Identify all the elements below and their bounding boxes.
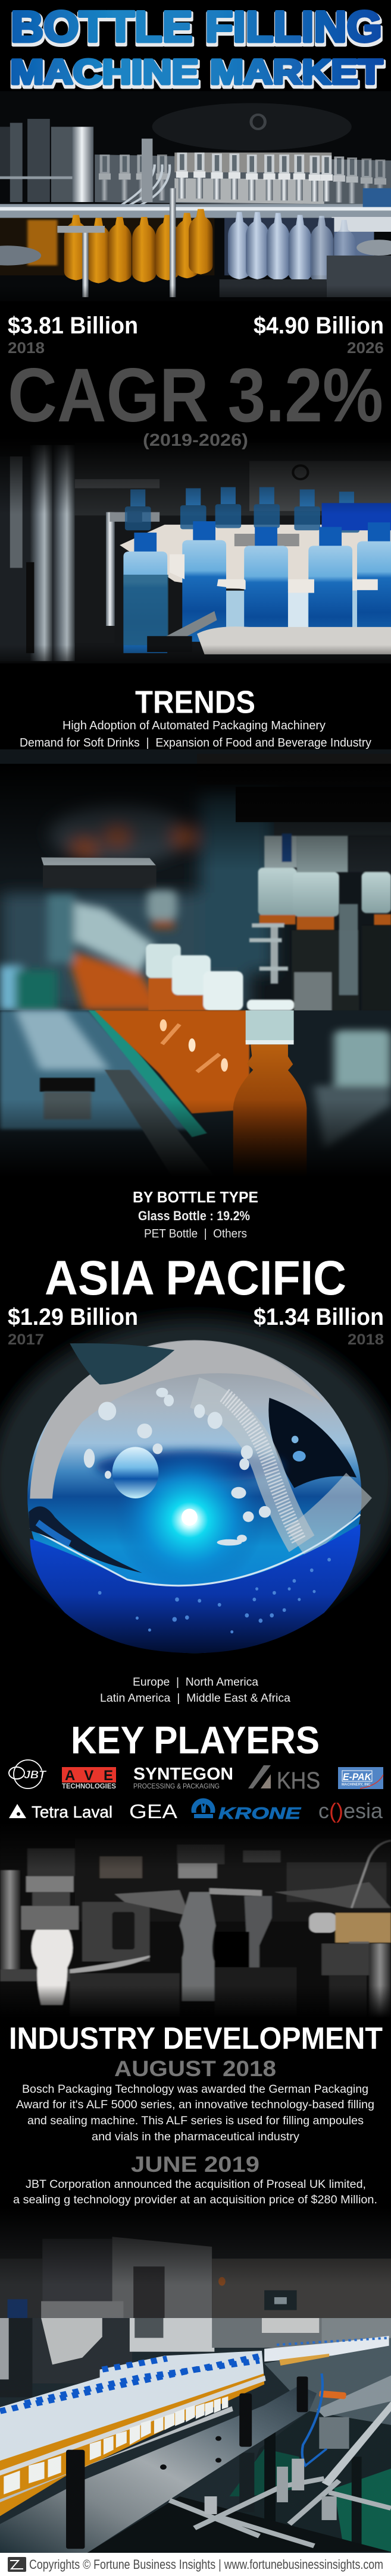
wall panels	[0, 2237, 391, 2318]
water surface line	[30, 1514, 360, 1586]
clear bottles band	[0, 2351, 264, 2468]
section: by bottle type	[133, 1188, 258, 1240]
title	[10, 3, 383, 92]
logo: AVE Technologies: AVE	[65, 1768, 113, 1784]
paragraph: JBT: JBT Corporation announced the acquisition of Proseal UK limited,	[26, 2178, 366, 2191]
well under plate	[220, 591, 391, 632]
logo: Krone: KRONE	[218, 1804, 302, 1822]
large bubble	[112, 1447, 158, 1498]
globe: water sphere	[0, 1318, 391, 1653]
blurred caps	[0, 890, 177, 1011]
background factory	[0, 2318, 391, 2425]
blue caps	[0, 2355, 262, 2411]
machine tank	[152, 103, 352, 150]
paragraph: Bosch: and vials in the pharmaceutical industry	[92, 2131, 300, 2143]
bubble spray	[195, 1393, 359, 1544]
conveyor	[0, 1010, 224, 1189]
far bottles	[264, 2336, 389, 2366]
background wall	[75, 443, 391, 515]
hose	[352, 1841, 391, 1908]
left cables and stripes	[0, 445, 115, 661]
logo: JBT	[9, 1760, 47, 1788]
deep blue band	[95, 1451, 284, 1483]
glass bottle rear	[243, 1896, 272, 1979]
stat: CAGR: (2019-2026)	[143, 431, 248, 450]
pneumatic cylinder	[309, 1913, 391, 1975]
stat: 2018 Asia Pacific value: 2018	[348, 1331, 384, 1348]
small bubbles	[84, 1388, 306, 1545]
logo: Coesia: c()esia	[318, 1799, 383, 1823]
milk bottle	[32, 1930, 73, 2005]
footer logo	[8, 2557, 26, 2572]
rail top	[0, 2376, 266, 2476]
section: industry development	[9, 2021, 383, 2206]
photo: grey bottle blowing machine	[0, 1823, 391, 2021]
date: August 2018: AUGUST 2018	[114, 2057, 276, 2081]
trend line 2: Demand for Soft Drinks | Expansion of Food and Beverage Industry	[20, 736, 371, 750]
section: by bottle type: PET Bottle | Others	[144, 1227, 247, 1240]
rim highlight	[30, 1341, 324, 1498]
date: June 2019: JUNE 2019	[131, 2152, 259, 2177]
logo: E-PAK: MACHINERY, INC.	[342, 1783, 371, 1787]
blue hose	[302, 2373, 327, 2465]
logo: KHS	[248, 1765, 320, 1794]
stat: 2017 Asia Pacific value: $1.29 Billion	[8, 1304, 138, 1330]
amber bottles	[64, 209, 212, 284]
right lower cylinders	[214, 1944, 391, 2021]
paragraph: Bosch: Award for it's ALF 5000 series, an innovative technology-based filling	[16, 2099, 374, 2111]
dark upper right	[268, 1398, 356, 1488]
filler heads	[249, 833, 391, 984]
stat: 2026 market value	[254, 313, 384, 357]
lower rail	[0, 2406, 233, 2502]
photo: orange bottles lower	[0, 1010, 391, 1189]
machinery right	[292, 904, 391, 1011]
background glow	[0, 1318, 391, 1637]
logo: Krone	[192, 1799, 302, 1822]
logo: JBT: JBT	[24, 1769, 47, 1781]
stat: 2018 market value: 2018	[8, 339, 45, 357]
other regions list: Europe | North America	[133, 1676, 258, 1689]
section: trends	[20, 685, 371, 750]
trend line 1: High Adoption of Automated Packaging Machinery	[62, 719, 326, 732]
bottles behind	[95, 1010, 249, 1113]
logo: E-PAK: E-PAK	[343, 1771, 373, 1783]
logo: KHS: KHS	[277, 1768, 320, 1794]
central glow	[115, 1448, 264, 1592]
hood	[197, 754, 391, 836]
photo: filling machine with amber and clear bottles	[0, 91, 391, 301]
back row bottles	[125, 487, 391, 533]
heading: key players: KEY PLAYERS	[71, 1718, 320, 1762]
stat: 2017 Asia Pacific value: 2017	[8, 1331, 44, 1348]
upper columns	[0, 1844, 280, 1969]
logo: Syntegon: PROCESSING & PACKAGING	[133, 1783, 220, 1790]
sharp caps	[146, 944, 294, 1010]
paragraph: JBT	[13, 2178, 377, 2206]
footer	[0, 2553, 391, 2576]
pour stream	[70, 1343, 174, 1384]
valve row	[95, 153, 391, 206]
logo: AVE Technologies: TECHNOLOGIES	[62, 1783, 116, 1790]
photo: blue bottles on filling plate	[0, 438, 391, 663]
heading: trends: TRENDS	[135, 685, 255, 720]
stat: 2018 market value	[8, 313, 138, 357]
shelf	[41, 858, 157, 888]
water center glow	[182, 1509, 198, 1526]
orange handle	[319, 2391, 346, 2399]
hoses	[120, 138, 170, 208]
stat: 2026 market value: 2026	[347, 339, 384, 357]
stat: 2018 Asia Pacific value	[254, 1304, 384, 1348]
bottle backdrop	[0, 218, 374, 275]
conveyor brackets	[66, 2376, 308, 2549]
sensor arm	[106, 511, 159, 626]
photo: orange bottles upper	[0, 750, 391, 1011]
logo: AVE Technologies	[62, 1767, 116, 1790]
stat: 2026 market value: $4.90 Billion	[254, 313, 384, 339]
poles and table	[0, 188, 391, 297]
lower fade	[0, 645, 391, 675]
steel beam	[0, 2385, 317, 2553]
foreground frame	[87, 2459, 391, 2553]
metal platform	[0, 1882, 391, 2021]
logos row	[9, 1760, 383, 1823]
section: by bottle type: BY BOTTLE TYPE	[133, 1188, 258, 1206]
heading: Asia Pacific: ASIA PACIFIC	[45, 1251, 346, 1305]
right machinery	[224, 2376, 391, 2552]
stat: 2017 Asia Pacific value	[8, 1304, 138, 1348]
sphere upper	[27, 1340, 362, 1653]
white plate	[120, 525, 391, 593]
section: by bottle type: Glass Bottle : 19.2%	[138, 1208, 250, 1223]
stat: 2018 Asia Pacific value: $1.34 Billion	[254, 1304, 384, 1330]
machinery background	[75, 1838, 391, 1922]
logo: E-PAK	[338, 1767, 383, 1789]
photo: conveyor with juice bottles	[0, 2318, 391, 2554]
wave left	[29, 1506, 142, 1573]
logo: Syntegon: SYNTEGON	[133, 1765, 233, 1784]
paragraph: Bosch: and sealing machine. This ALF series is used for filling ampoules	[27, 2115, 364, 2127]
juice band	[0, 2373, 264, 2516]
paragraph: Bosch: Bosch Packaging Technology was awarded the German Packaging	[22, 2083, 368, 2096]
blue water body	[30, 1524, 361, 1653]
logo: Tetra Laval: Tetra Laval	[32, 1803, 112, 1821]
other regions list	[100, 1676, 290, 1705]
base ring and rod	[147, 611, 391, 654]
other regions list: Latin America | Middle East & Africa	[100, 1692, 290, 1705]
front row bottles	[123, 521, 391, 653]
blurred bottle right	[314, 1030, 391, 1149]
fade over blue bottles photo	[0, 437, 391, 514]
glass bottle centre	[180, 1892, 215, 2001]
photo: factory room upper	[0, 2209, 391, 2320]
logo: GEA: GEA	[129, 1800, 177, 1822]
clear bottles	[228, 212, 355, 287]
blurred background	[0, 791, 274, 1011]
rail	[0, 188, 391, 232]
main bottle	[233, 1010, 306, 1187]
labels	[4, 2397, 228, 2495]
dark drum	[214, 1932, 249, 1967]
water bubbles	[98, 1558, 331, 1633]
title: MACHINE MARKET	[10, 53, 383, 92]
title: BOTTLE FILLING	[11, 3, 382, 51]
paragraph: Bosch	[16, 2083, 374, 2143]
paragraph: JBT: a sealing g technology provider at an acquisition price of $280 Million.	[13, 2194, 377, 2206]
stat: 2018 market value: $3.81 Billion	[8, 313, 138, 339]
plate fingers	[170, 554, 378, 593]
left columns	[0, 119, 93, 202]
